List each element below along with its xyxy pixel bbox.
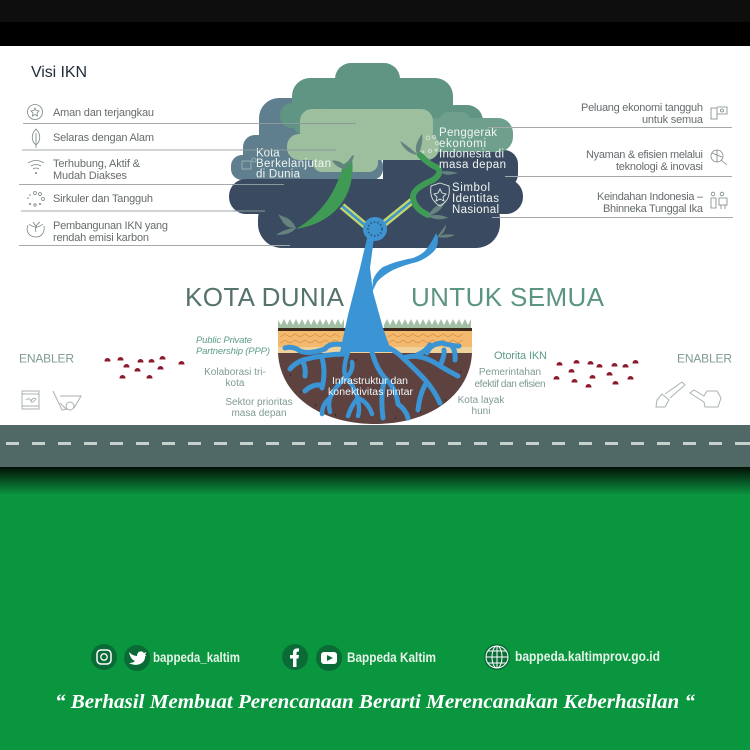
label: Kota layak huni: Kota layak (458, 395, 505, 406)
text: Infrastruktur dan konektivitas pintar: Infrastruktur dan (332, 375, 408, 387)
orange layer (278, 331, 472, 348)
enabler right: ENABLER (677, 352, 732, 366)
text: Penggerak ekonomi: ekonomi (439, 138, 486, 150)
item: Nyaman & efisien: teknologi & inovasi (616, 161, 703, 173)
brown bowl (278, 353, 472, 424)
footer text: Bappeda Kaltim: Bappeda Kaltim (347, 649, 436, 665)
crown: dark navy layer (229, 150, 523, 248)
heading: UNTUK SEMUA: UNTUK SEMUA (411, 282, 605, 312)
item: Keindahan Indonesia: Keindahan Indonesia – (597, 191, 704, 203)
white infographic panel (0, 46, 750, 426)
label: PPP: Partnership (PPP) (196, 346, 270, 357)
list dividers (19, 124, 356, 246)
blue node (363, 217, 387, 241)
text: Penggerak ekonomi: Penggerak (439, 127, 497, 139)
icon: kota (242, 158, 256, 169)
right vision list (488, 102, 733, 218)
top black band (0, 0, 750, 46)
item: Selaras dengan Alam (32, 129, 154, 148)
branches and node (276, 134, 458, 241)
crown: right lighter lobe (423, 112, 513, 152)
zigzag (280, 334, 463, 343)
text: Simbol Identitas Nasional: Nasional (452, 204, 499, 216)
topsoil band (278, 328, 472, 331)
text: Kota Berkelanjutan di Dunia (256, 148, 331, 180)
icon: watering can (690, 390, 721, 407)
item: Terhubung, Aktif & Mudah Diakses: Mudah Diakses (53, 170, 128, 182)
item: Terhubung, Aktif & Mudah Diakses: Terhubung, Aktif & (53, 158, 141, 170)
item: Pembangunan IKN yang rendah emisi karbon (27, 220, 168, 244)
text: Infrastruktur dan konektivitas pintar (328, 375, 414, 398)
footer social: twitter (124, 645, 150, 671)
icon: shovel (656, 382, 685, 407)
text: Penggerak ekonomi: Indonesia di (439, 148, 504, 160)
text: Simbol Identitas Nasional: Simbol (452, 182, 490, 194)
grey-green leaves (276, 134, 458, 238)
item: Peluang ekonomi (581, 102, 727, 126)
icon: seed packet (22, 391, 39, 409)
label: Sektor prioritas: masa depan (231, 408, 287, 419)
text: Simbol Identitas Nasional (452, 182, 499, 216)
item: Peluang ekonomi: Peluang ekonomi tangguh (581, 102, 703, 114)
list dividers (488, 128, 733, 218)
icon: shield star (431, 183, 449, 206)
label: PPP: Public Private (196, 335, 252, 346)
right enabler labels (458, 350, 547, 417)
soil speckles (290, 360, 461, 418)
item: Pembangunan IKN yang rendah emisi karbon: Pembangunan IKN yang (53, 220, 168, 232)
crown: slate blue layer (231, 98, 383, 180)
item: Terhubung, Aktif & Mudah Diakses (28, 158, 141, 182)
label: Kolaborasi tri-kota: Kolaborasi tri- (204, 367, 266, 378)
green footer background (0, 467, 750, 750)
soil cross-section (278, 319, 472, 424)
roots (285, 343, 459, 418)
item: Aman dan terjangkau: Aman dan terjangkau (53, 107, 154, 119)
label: Pemerintahan (474, 367, 546, 390)
text: Penggerak ekonomi: masa depan (439, 159, 506, 171)
trunk (340, 238, 392, 352)
left enabler labels (196, 335, 293, 419)
text: Kota Berkelanjutan di Dunia: Berkelanjutan (256, 158, 331, 170)
icon: wheelbarrow (53, 391, 81, 410)
footer icon: globe (484, 644, 510, 670)
label: PPP (196, 335, 270, 357)
red seeds left (105, 356, 184, 378)
left vision list (19, 104, 356, 246)
tree crown (229, 63, 523, 248)
crown: top green layer (280, 63, 483, 145)
upper side branch (372, 233, 438, 292)
item: Sirkuler dan Tangguh (27, 192, 153, 206)
road dashes (6, 442, 750, 445)
text: Infrastruktur dan konektivitas pintar: konektivitas pintar (328, 386, 414, 398)
tree trunk and roots (285, 233, 459, 418)
item: Nyaman & efisien (586, 149, 727, 173)
label: Pemerintahan: Pemerintahan (479, 367, 541, 378)
label: Otorita IKN: Otorita IKN (494, 350, 547, 362)
green right branch (413, 155, 439, 215)
footer social: youtube (316, 645, 342, 671)
footer social: instagram (91, 644, 117, 670)
footer quote: “ Berhasil Membuat Perencanaan Berarti Merencanakan Keberhasilan “ (55, 691, 695, 713)
item: Keindahan Indonesia (597, 191, 727, 215)
label: Kolaborasi tri-kota: kota (226, 378, 245, 389)
heading: KOTA DUNIA: KOTA DUNIA (185, 282, 345, 312)
item: Peluang ekonomi: untuk semua (642, 114, 704, 126)
text: Simbol Identitas Nasional: Identitas (452, 193, 499, 205)
footer text: website: bappeda.kaltimprov.go.id (515, 648, 660, 664)
item: Aman dan terjangkau (28, 104, 154, 120)
footer text: bappeda_kaltim: bappeda_kaltim (153, 649, 240, 665)
label: Kota layak huni: huni (472, 406, 490, 417)
green left branch (296, 158, 353, 229)
red seeds right (554, 360, 638, 387)
label: Kota layak huni (458, 395, 505, 417)
text: Kota Berkelanjutan di Dunia: di Dunia (256, 168, 301, 180)
item: Nyaman & efisien: Nyaman & efisien melalui (586, 149, 703, 161)
label: Sektor prioritas: Sektor prioritas (225, 397, 293, 408)
grass (278, 319, 471, 328)
sand layer (278, 347, 472, 353)
text: Kota Berkelanjutan di Dunia: Kota (256, 148, 280, 160)
icon: circular dots (422, 136, 438, 153)
branch stripes (342, 201, 412, 227)
enabler left: ENABLER (19, 352, 74, 366)
label: Kolaborasi tri-kota (204, 367, 266, 389)
heading: Visi IKN: Visi IKN (31, 64, 87, 81)
road (0, 425, 750, 467)
label: Sektor prioritas (225, 397, 293, 419)
item: Selaras dengan Alam: Selaras dengan Alam (53, 132, 154, 144)
footer social: facebook (282, 644, 308, 670)
item: Sirkuler dan Tangguh: Sirkuler dan Tangguh (53, 193, 153, 205)
item: Keindahan Indonesia: Bhinneka Tunggal Ika (603, 203, 704, 215)
item: Pembangunan IKN yang rendah emisi karbon: rendah emisi karbon (53, 232, 149, 244)
text: Penggerak ekonomi (439, 127, 506, 171)
crown: light green layer (287, 109, 439, 172)
label: Pemerintahan: efektif dan efisien (474, 379, 546, 390)
